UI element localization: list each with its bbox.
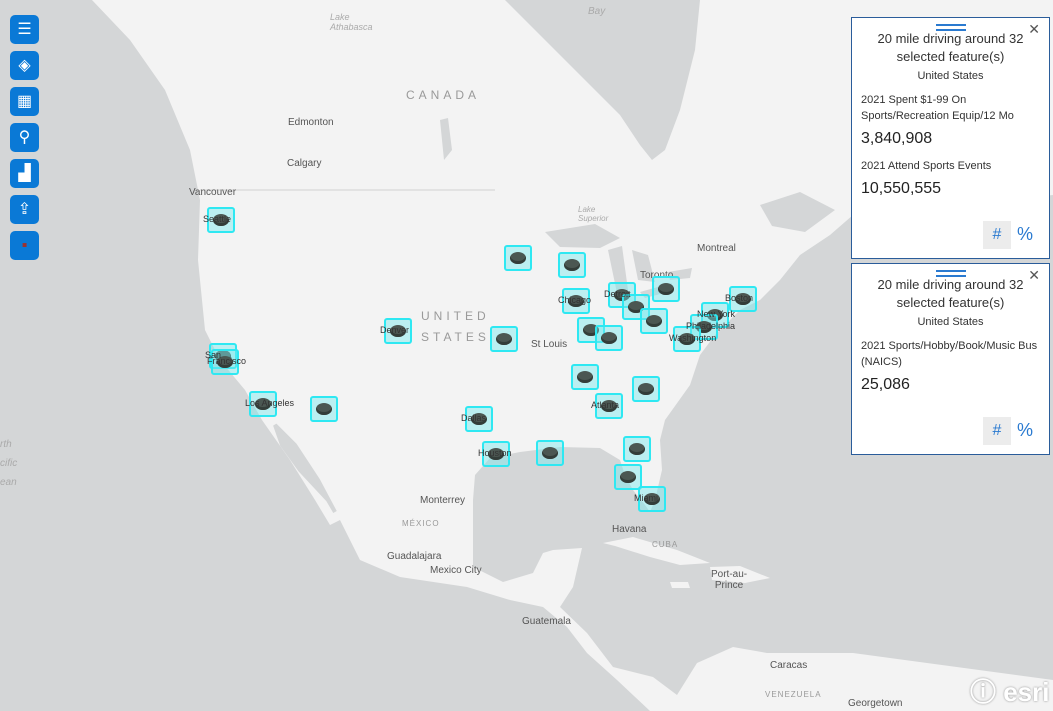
text: Montreal xyxy=(697,243,736,254)
icon: menu xyxy=(10,15,39,44)
text: Miami xyxy=(634,493,658,503)
panel: sports spending: ✕ xyxy=(1028,21,1040,37)
icon: search: ⚲ xyxy=(19,129,30,146)
text: Seattle xyxy=(203,214,231,224)
toolbar xyxy=(10,15,39,260)
panel: sports businesses: selected feature(s) xyxy=(897,295,1004,310)
icon: share: ⇪ xyxy=(18,201,31,218)
text: New York xyxy=(697,309,735,319)
panel: sports businesses: 20 mile driving around 32 xyxy=(878,277,1023,292)
text: Georgetown xyxy=(848,698,902,709)
text: ean xyxy=(0,477,17,488)
panel: sports spending: selected feature(s) xyxy=(897,49,1004,64)
text: San xyxy=(205,350,221,360)
icon: layers: ◈ xyxy=(18,57,31,74)
markers xyxy=(203,207,757,512)
text: St Louis xyxy=(531,339,567,350)
map labels: CANADA xyxy=(406,88,480,102)
text: Houston xyxy=(478,448,512,458)
icon: share xyxy=(10,195,39,224)
text: Denver xyxy=(380,325,409,335)
text: Guatemala xyxy=(522,616,571,627)
panel: sports businesses xyxy=(851,263,1050,455)
text: VENEZUELA xyxy=(765,690,822,699)
text: Philadelphia xyxy=(686,321,735,331)
panel: sports businesses: 2021 Sports/Hobby/Book/Music Bus xyxy=(861,340,1037,352)
icon: layers xyxy=(10,51,39,80)
panel: sports spending: # xyxy=(993,226,1001,243)
panel: sports spending: United States xyxy=(917,70,984,82)
icon: chart: ▟ xyxy=(18,165,31,182)
panel: sports businesses: ✕ xyxy=(1028,267,1040,283)
text: Francisco xyxy=(207,356,246,366)
text: Superior xyxy=(578,214,608,223)
text: Lake xyxy=(578,205,595,214)
text: CUBA xyxy=(652,540,678,549)
icon: chart xyxy=(10,159,39,188)
panel: sports businesses: 25,086 xyxy=(861,376,910,393)
panel: sports businesses: % xyxy=(1017,420,1033,440)
text: Detroit xyxy=(604,289,631,299)
text: Vancouver xyxy=(189,187,236,198)
text: Washington xyxy=(669,333,716,343)
text: Port-au- xyxy=(711,569,747,580)
icon: menu: ☰ xyxy=(17,21,32,38)
text: Calgary xyxy=(287,158,321,169)
text: Atlanta xyxy=(591,400,619,410)
text: Monterrey xyxy=(420,495,465,506)
icon: legend: ▪ xyxy=(22,237,27,254)
text: Lake xyxy=(330,12,350,22)
text: Dallas xyxy=(461,413,486,423)
esri logo: ⓘ esri xyxy=(970,677,1050,707)
text: STATES xyxy=(421,330,490,344)
icon: search xyxy=(10,123,39,152)
icon: grid xyxy=(10,87,39,116)
icon: grid: ▦ xyxy=(17,93,32,110)
icon: legend xyxy=(10,231,39,260)
text: rth xyxy=(0,439,12,450)
text: Prince xyxy=(715,580,743,591)
panel: sports spending: 3,840,908 xyxy=(861,130,932,147)
panel: sports spending: Sports/Recreation Equip/12 Mo xyxy=(861,110,1014,122)
text: MÉXICO xyxy=(402,519,440,528)
text: Boston xyxy=(725,293,753,303)
text: Toronto xyxy=(640,270,673,281)
text: Guadalajara xyxy=(387,551,441,562)
panel: sports businesses: # xyxy=(993,422,1001,439)
panel: sports businesses: (NAICS) xyxy=(861,356,902,368)
panel: sports spending: 10,550,555 xyxy=(861,180,941,197)
panel: sports spending: 20 mile driving around 32 xyxy=(878,31,1023,46)
text: Mexico City xyxy=(430,565,482,576)
text: UNITED xyxy=(421,309,490,323)
text: Athabasca xyxy=(330,22,373,32)
text: cific xyxy=(0,458,17,469)
panel: sports spending: % xyxy=(1017,224,1033,244)
text: Bay xyxy=(588,6,605,17)
panel: sports businesses: United States xyxy=(917,316,984,328)
text: Edmonton xyxy=(288,117,334,128)
panel: sports spending xyxy=(851,17,1050,259)
text: Havana xyxy=(612,524,646,535)
text: Chicago xyxy=(558,295,591,305)
text: Los Angeles xyxy=(245,398,294,408)
panel: sports spending: 2021 Spent $1-99 On xyxy=(861,94,966,106)
panel: sports spending: 2021 Attend Sports Events xyxy=(861,160,991,172)
text: Caracas xyxy=(770,660,807,671)
